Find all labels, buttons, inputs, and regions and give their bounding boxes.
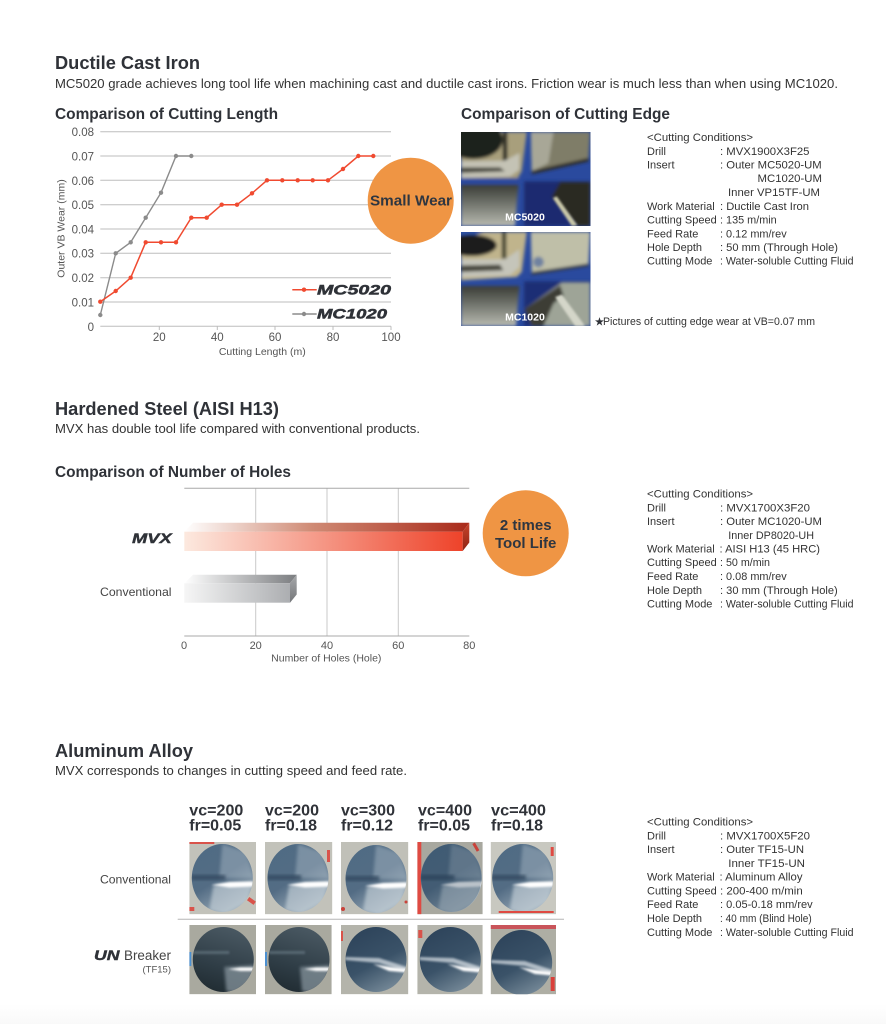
column headers: cutting parameters	[189, 803, 546, 835]
cutting conditions: ductile cast iron: Drill	[647, 146, 666, 158]
column headers: cutting parameters: fr=0.18	[265, 818, 317, 835]
callout: 2 times tool life: Tool Life	[495, 535, 556, 552]
photos: UN breaker row	[189, 925, 556, 998]
heading: ductile cast iron: Ductile Cast Iron	[55, 52, 200, 73]
cutting conditions: ductile cast iron: : Outer MC5020-UM	[720, 160, 822, 172]
cutting conditions: hardened steel: Cutting Mode	[647, 598, 712, 610]
cutting conditions: aluminum alloy: : Aluminum Alloy	[720, 872, 803, 884]
column headers: cutting parameters: vc=300	[341, 803, 395, 820]
cutting conditions: hardened steel: : 30 mm (Through Hole)	[720, 585, 838, 597]
row label: conventional: Conventional	[100, 872, 171, 886]
cutting conditions: hardened steel: Work Material	[647, 544, 715, 556]
photo: MC1020 cutting edge	[447, 232, 590, 326]
photo: UN breaker vc400 fr0.05	[417, 925, 483, 994]
photo: MC5020 cutting edge	[444, 120, 590, 226]
x axis tick labels: 20	[250, 640, 262, 652]
cutting conditions: aluminum alloy: Insert	[647, 844, 675, 856]
x axis tick labels: 40	[321, 640, 333, 652]
y axis tick labels: 0.07	[72, 152, 94, 164]
footnote: pictures of cutting edge wear: ★	[595, 317, 604, 328]
photo: conventional vc300 fr0.12	[341, 842, 408, 914]
y axis tick labels: 0.08	[72, 127, 94, 139]
cutting conditions: hardened steel: Cutting Speed	[647, 557, 717, 569]
cutting conditions: hardened steel: Inner DP8020-UH	[728, 530, 814, 542]
x axis tick labels: 60	[392, 640, 404, 652]
y axis tick labels: 0.06	[72, 176, 94, 188]
cutting conditions: ductile cast iron: : 0.12 mm/rev	[720, 228, 787, 240]
cutting conditions: hardened steel: Drill	[647, 502, 666, 514]
cutting conditions: aluminum alloy: Cutting Speed	[647, 886, 717, 898]
cutting conditions: aluminum alloy: Drill	[647, 830, 666, 842]
cutting conditions: aluminum alloy: Cutting Mode	[647, 927, 712, 939]
legend	[292, 282, 391, 322]
cutting conditions: aluminum alloy: : Outer TF15-UN	[720, 844, 804, 856]
callout: small wear	[368, 158, 454, 244]
legend: MC5020	[317, 282, 391, 298]
cutting conditions: ductile cast iron: Cutting Mode	[647, 256, 712, 268]
y axis tick labels: 0.04	[72, 224, 95, 236]
cutting conditions: hardened steel	[647, 488, 854, 610]
cutting conditions: hardened steel: : MVX1700X3F20	[720, 502, 810, 514]
x axis tick labels: 20	[153, 332, 166, 344]
column headers: cutting parameters: vc=400	[491, 803, 546, 820]
cutting conditions: aluminum alloy: : 0.05-0.18 mm/rev	[720, 899, 813, 911]
heading: hardened steel: Hardened Steel (AISI H13)	[55, 398, 279, 419]
photo: MC5020 cutting edge: MC5020	[505, 212, 545, 224]
cutting conditions: ductile cast iron	[647, 132, 854, 268]
cutting conditions: aluminum alloy: Hole Depth	[647, 913, 702, 925]
y axis tick labels: 0.05	[72, 200, 94, 212]
heading: comparison of cutting length: Comparison of Cutting Length	[55, 106, 278, 123]
cutting conditions: aluminum alloy: <Cutting Conditions>	[647, 817, 753, 829]
heading: comparison of cutting edge: Comparison of Cutting Edge	[461, 106, 670, 123]
bar: MVX	[184, 523, 469, 551]
cutting conditions: hardened steel: <Cutting Conditions>	[647, 488, 753, 500]
photo: conventional vc400 fr0.05	[417, 842, 483, 914]
photo: conventional vc400 fr0.18	[490, 842, 556, 914]
cutting conditions: ductile cast iron: Feed Rate	[647, 228, 698, 240]
column headers: cutting parameters: fr=0.12	[341, 818, 393, 835]
section: aluminum alloy	[55, 740, 854, 998]
x axis tick labels: 0	[181, 640, 187, 652]
cutting conditions: hardened steel: Hole Depth	[647, 585, 702, 597]
cutting conditions: ductile cast iron: : MVX1900X3F25	[720, 146, 810, 158]
x axis tick labels: 100	[381, 332, 401, 344]
row label: UN breaker	[94, 948, 172, 976]
cutting conditions: ductile cast iron: : 135 m/min	[720, 214, 777, 226]
column headers: cutting parameters: fr=0.05	[189, 818, 241, 835]
y axis tick labels: 0.03	[72, 248, 94, 260]
cutting conditions: ductile cast iron: Insert	[647, 160, 675, 172]
cutting conditions: hardened steel: : Outer MC1020-UM	[720, 516, 822, 528]
section: hardened steel	[55, 398, 854, 665]
cutting conditions: aluminum alloy: : Water-soluble Cutting Fluid	[720, 927, 854, 939]
photo: MC1020 cutting edge: MC1020	[505, 311, 545, 323]
cutting conditions: hardened steel: : 0.08 mm/rev	[720, 571, 787, 583]
legend: MC1020	[317, 306, 387, 322]
y axis tick labels	[72, 127, 95, 334]
description: aluminum alloy: MVX corresponds to changes in cutting speed and feed rate.	[55, 763, 407, 778]
cutting conditions: aluminum alloy: : 40 mm (Blind Hole)	[720, 913, 812, 925]
y axis tick labels: 0.02	[72, 273, 94, 285]
series: MC5020	[98, 154, 375, 304]
cutting conditions: hardened steel: : AISI H13 (45 HRC)	[720, 544, 820, 556]
cutting conditions: aluminum alloy: : 200-400 m/min	[720, 886, 803, 898]
divider	[178, 918, 564, 920]
x axis tick labels: 60	[269, 332, 281, 344]
line chart: cutting length	[56, 127, 401, 358]
cutting conditions: hardened steel: : 50 m/min	[720, 557, 770, 569]
callout: small wear: Small Wear	[370, 192, 452, 210]
column headers: cutting parameters: vc=200	[265, 803, 319, 820]
heading: aluminum alloy: Aluminum Alloy	[55, 740, 194, 761]
bar chart: number of holes	[100, 488, 475, 665]
footnote: pictures of cutting edge wear: Pictures of cutting edge wear at VB=0.07 mm	[603, 316, 815, 328]
x axis tick labels	[181, 640, 475, 652]
cutting conditions: hardened steel: Feed Rate	[647, 571, 698, 583]
y axis title: Outer VB Wear (mm)	[56, 179, 68, 278]
cutting conditions: ductile cast iron: : 50 mm (Through Hole)	[720, 242, 838, 254]
column headers: cutting parameters: fr=0.05	[418, 818, 470, 835]
x axis title: Cutting Length (m)	[219, 346, 306, 358]
section: ductile cast iron	[55, 52, 854, 358]
column headers: cutting parameters: fr=0.18	[491, 818, 543, 835]
photo: UN breaker vc200 fr0.18	[265, 925, 332, 994]
cutting conditions: aluminum alloy	[647, 817, 854, 939]
row label: UN breaker: UN	[94, 948, 120, 963]
photos: conventional row	[189, 842, 557, 915]
x axis tick labels: 80	[463, 640, 475, 652]
photo: UN breaker vc200 fr0.05	[189, 925, 256, 994]
y axis tick labels: 0.01	[72, 298, 94, 310]
cutting conditions: ductile cast iron: Cutting Speed	[647, 214, 717, 226]
cutting conditions: hardened steel: Insert	[647, 516, 675, 528]
cutting conditions: ductile cast iron: MC1020-UM	[758, 173, 822, 185]
page bottom fade	[0, 1004, 886, 1024]
column headers: cutting parameters: vc=400	[418, 803, 472, 820]
photo: UN breaker vc300 fr0.12	[341, 925, 408, 994]
heading: comparison of number of holes: Comparison of Number of Holes	[55, 464, 291, 481]
category label: conventional: Conventional	[100, 585, 172, 599]
y axis tick labels: 0	[88, 322, 94, 334]
callout: 2 times tool life	[483, 490, 569, 576]
x axis tick labels: 80	[327, 332, 339, 344]
x axis title: Number of Holes (Hole)	[271, 653, 381, 665]
cutting conditions: aluminum alloy: Work Material	[647, 872, 715, 884]
category label: MVX: MVX	[132, 530, 174, 546]
description: ductile cast iron: MC5020 grade achieves long tool life when machining cast and ductile cast irons. Friction wear is much less than when using MC1020.	[55, 76, 838, 91]
x axis tick labels	[153, 332, 401, 344]
row label: UN breaker: Breaker	[124, 948, 172, 963]
cutting conditions: ductile cast iron: <Cutting Conditions>	[647, 132, 753, 144]
cutting conditions: ductile cast iron: : Water-soluble Cutting Fluid	[720, 256, 854, 268]
cutting conditions: hardened steel: : Water-soluble Cutting Fluid	[720, 598, 854, 610]
cutting conditions: aluminum alloy: Feed Rate	[647, 899, 698, 911]
column headers: cutting parameters: vc=200	[189, 803, 243, 820]
cutting conditions: aluminum alloy: : MVX1700X5F20	[720, 830, 810, 842]
bar: conventional	[184, 575, 297, 603]
cutting conditions: ductile cast iron: Hole Depth	[647, 242, 702, 254]
row label: UN breaker: (TF15)	[142, 965, 171, 976]
photo: UN breaker vc400 fr0.18	[490, 925, 556, 994]
series: MC1020	[98, 154, 194, 317]
photo: conventional vc200 fr0.18	[265, 842, 332, 914]
photo: conventional vc200 fr0.05	[189, 842, 256, 914]
callout: 2 times tool life: 2 times	[500, 517, 552, 534]
cutting conditions: ductile cast iron: Work Material	[647, 201, 715, 213]
cutting conditions: aluminum alloy: Inner TF15-UN	[728, 858, 805, 870]
cutting conditions: ductile cast iron: Inner VP15TF-UM	[728, 187, 820, 199]
x axis tick labels: 40	[211, 332, 224, 344]
cutting conditions: ductile cast iron: : Ductile Cast Iron	[720, 201, 809, 213]
description: hardened steel: MVX has double tool life compared with conventional products.	[55, 421, 420, 436]
